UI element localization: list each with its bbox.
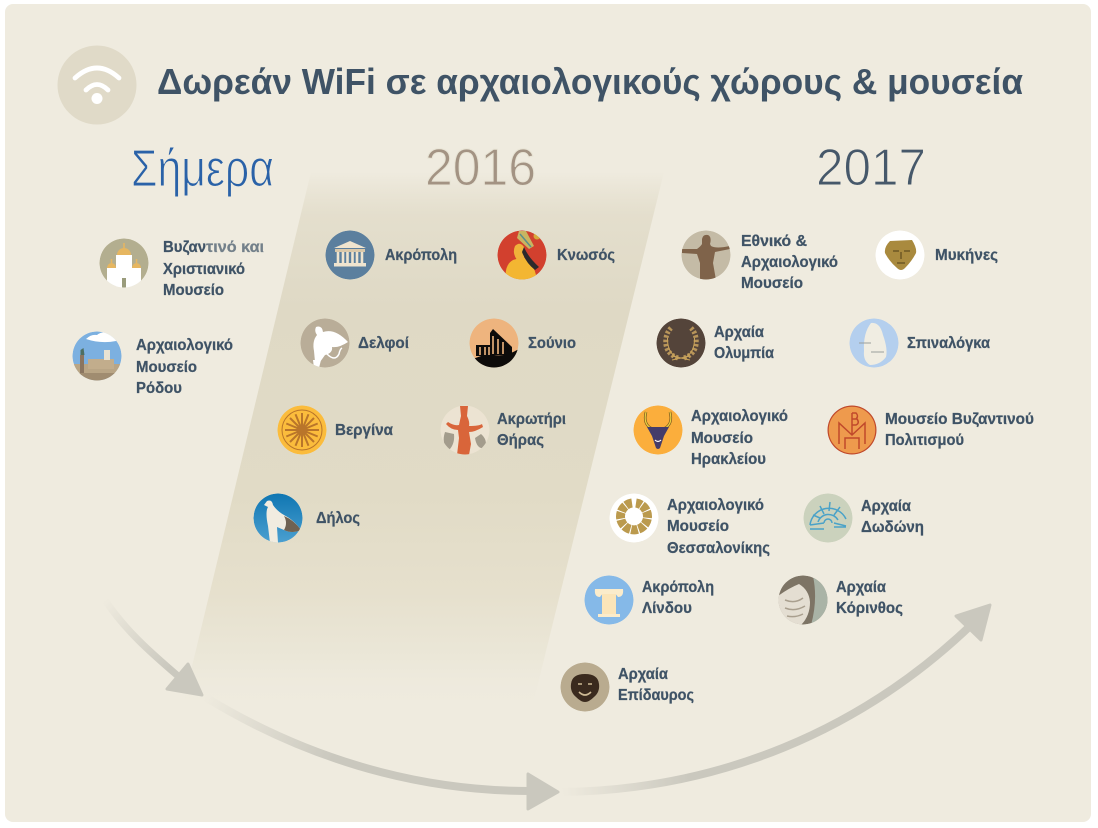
site: Mycenae [876,230,998,280]
site: Knossos [498,230,615,280]
site: Museum of Byzantine Culture [828,406,1034,454]
site: National Archaeological Museum [682,230,838,292]
icon: Artemision bronze [682,230,730,280]
label: Επίδαυρος [618,687,694,704]
icon: island map [850,318,898,368]
label: Πολιτισμού [885,432,964,449]
label: Βεργίνα [335,422,393,439]
site: Delos [254,494,360,543]
site: Heraklion Museum [634,406,788,468]
label: Αρχαία [836,579,886,596]
label: Αρχαία [861,498,911,515]
icon: monogram [828,406,876,454]
icon: gold wreath [610,494,658,542]
icon: Rhodes harbour [72,332,122,381]
icon: prince of lilies fresco [498,230,546,280]
panel: 2016 band [181,172,664,712]
label: Σπιναλόγκα [907,335,990,352]
label: Αρχαία [714,324,764,341]
label: Μουσείο Βυζαντινού [885,411,1034,428]
label: Μυκήνες [935,247,998,264]
label: Λίνδου [642,600,692,617]
site: Rhodes [72,332,233,397]
label: Δήλος [316,510,360,527]
label: Αρχαιολογικό [741,254,838,271]
label: Ρόδου [136,380,182,397]
label: Εθνικό & [741,233,807,250]
label: Σούνιο [528,335,576,352]
label: τινό και [206,239,264,256]
site: Corinth [778,576,903,625]
site: Olympia [656,318,774,368]
site: Acropolis of Lindos [584,576,714,624]
icon: church [100,238,148,288]
label: Μουσείο [667,518,729,535]
label: Μουσείο [741,275,803,292]
label: Ολυμπία [714,345,774,362]
site: Spinalonga [850,318,990,368]
label: Ακρωτήρι [497,411,566,428]
label: Μουσείο [163,282,224,299]
label: Κόρινθος [836,600,903,617]
label: Αρχαιολογικό [136,337,233,354]
site: Thessaloniki Museum [610,494,770,557]
site: Akrotiri [440,406,566,455]
icon: Vergina sun [278,406,326,454]
site: Delphi [300,318,409,368]
arrow: 2017 onward [562,605,990,792]
site: Acropolis [326,230,457,280]
label: Δωδώνη [861,519,924,536]
icon: mask of Agamemnon [876,230,924,280]
heading: 2016: 2016 [425,139,536,197]
icon: sphinx [300,318,350,368]
icon: wifi [58,46,136,124]
label: Μουσείο [691,430,753,447]
label: Μουσείο [136,359,197,376]
icon: ionic column [584,576,634,624]
icon: temple of Poseidon [469,318,519,368]
label: Βυζαν [163,239,206,256]
icon: bull head [634,406,682,454]
label: Θεσσαλονίκης [667,540,770,557]
label: Ακρόπολη [385,247,457,264]
icon: laurel wreath [656,318,706,368]
icon: Thera fresco [440,406,490,455]
label: Ακρόπολη [642,579,714,596]
icon: theatre mask [560,662,610,712]
label: Δελφοί [358,335,409,352]
label: Αρχαία [618,666,668,683]
title: Δωρεάν WiFi σε αρχαιολογικούς χώρους & μουσεία [157,61,1023,102]
label: Αρχαιολογικό [667,497,764,514]
label: Αρχαιολογικό [691,408,788,425]
arrow: today to 2016 [105,600,202,695]
arrow: 2016 to 2017 [205,697,558,809]
label: Ηρακλείου [691,451,766,468]
icon: temple [326,230,374,280]
label: Θήρας [497,432,544,449]
site: Byzantine and Christian Museum [100,238,264,299]
header [58,46,1023,124]
label: Κνωσός [557,247,615,264]
icon: theatre plan [804,494,852,542]
heading: today: Σήμερα [131,140,274,198]
site: Dodona [804,494,924,542]
site: Vergina [278,406,393,454]
icon: Delos lion [254,494,302,543]
icon: draped statue [778,576,828,625]
site: Sounion [469,318,576,368]
site: Epidaurus [560,662,694,712]
heading: 2017: 2017 [816,139,926,197]
label: Χριστιανικό [163,261,245,278]
